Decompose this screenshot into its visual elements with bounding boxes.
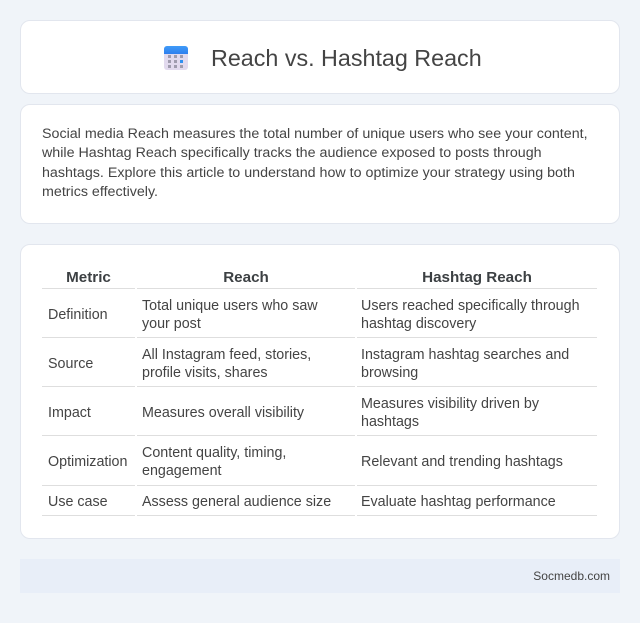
comparison table: Evaluate hashtag performance bbox=[361, 494, 556, 510]
comparison table: browsing bbox=[361, 365, 418, 381]
title card bbox=[20, 20, 620, 94]
comparison table: Measures visibility driven by bbox=[361, 396, 539, 412]
comparison table: Users reached specifically through bbox=[361, 298, 580, 314]
comparison table: Instagram hashtag searches and bbox=[361, 347, 569, 363]
intro text: while Hashtag Reach specifically tracks the audience exposed to posts through bbox=[42, 145, 542, 161]
footer text: Socmedb.com bbox=[533, 569, 610, 583]
intro text bbox=[42, 126, 588, 200]
comparison table: All Instagram feed, stories, bbox=[142, 347, 311, 363]
comparison table: Optimization bbox=[48, 454, 127, 470]
comparison table: your post bbox=[142, 316, 201, 332]
comparison table bbox=[42, 269, 597, 516]
comparison table: Total unique users who saw bbox=[142, 298, 318, 314]
intro text: hashtags. Explore this article to understand how to optimize your strategy using both bbox=[42, 165, 575, 181]
table card bbox=[20, 244, 620, 539]
title: Reach vs. Hashtag Reach bbox=[211, 45, 482, 71]
comparison table: Reach bbox=[223, 269, 269, 286]
comparison table: Impact bbox=[48, 405, 91, 421]
comparison table: Relevant and trending hashtags bbox=[361, 454, 563, 470]
comparison table: engagement bbox=[142, 463, 222, 479]
intro card bbox=[20, 104, 620, 224]
intro text: Social media Reach measures the total number of unique users who see your content, bbox=[42, 126, 588, 142]
comparison table: Source bbox=[48, 356, 93, 372]
comparison table: Use case bbox=[48, 494, 108, 510]
intro text: metrics effectively. bbox=[42, 184, 158, 200]
comparison table: Content quality, timing, bbox=[142, 445, 286, 461]
footer bar bbox=[20, 559, 620, 593]
comparison table: Metric bbox=[66, 269, 111, 286]
comparison table: Assess general audience size bbox=[142, 494, 331, 510]
comparison table: hashtag discovery bbox=[361, 316, 476, 332]
comparison table: hashtags bbox=[361, 414, 419, 430]
comparison table: profile visits, shares bbox=[142, 365, 268, 381]
comparison table: Hashtag Reach bbox=[422, 269, 532, 286]
icon: calendar bbox=[164, 46, 188, 70]
comparison table: Definition bbox=[48, 307, 108, 323]
comparison table: Measures overall visibility bbox=[142, 405, 304, 421]
